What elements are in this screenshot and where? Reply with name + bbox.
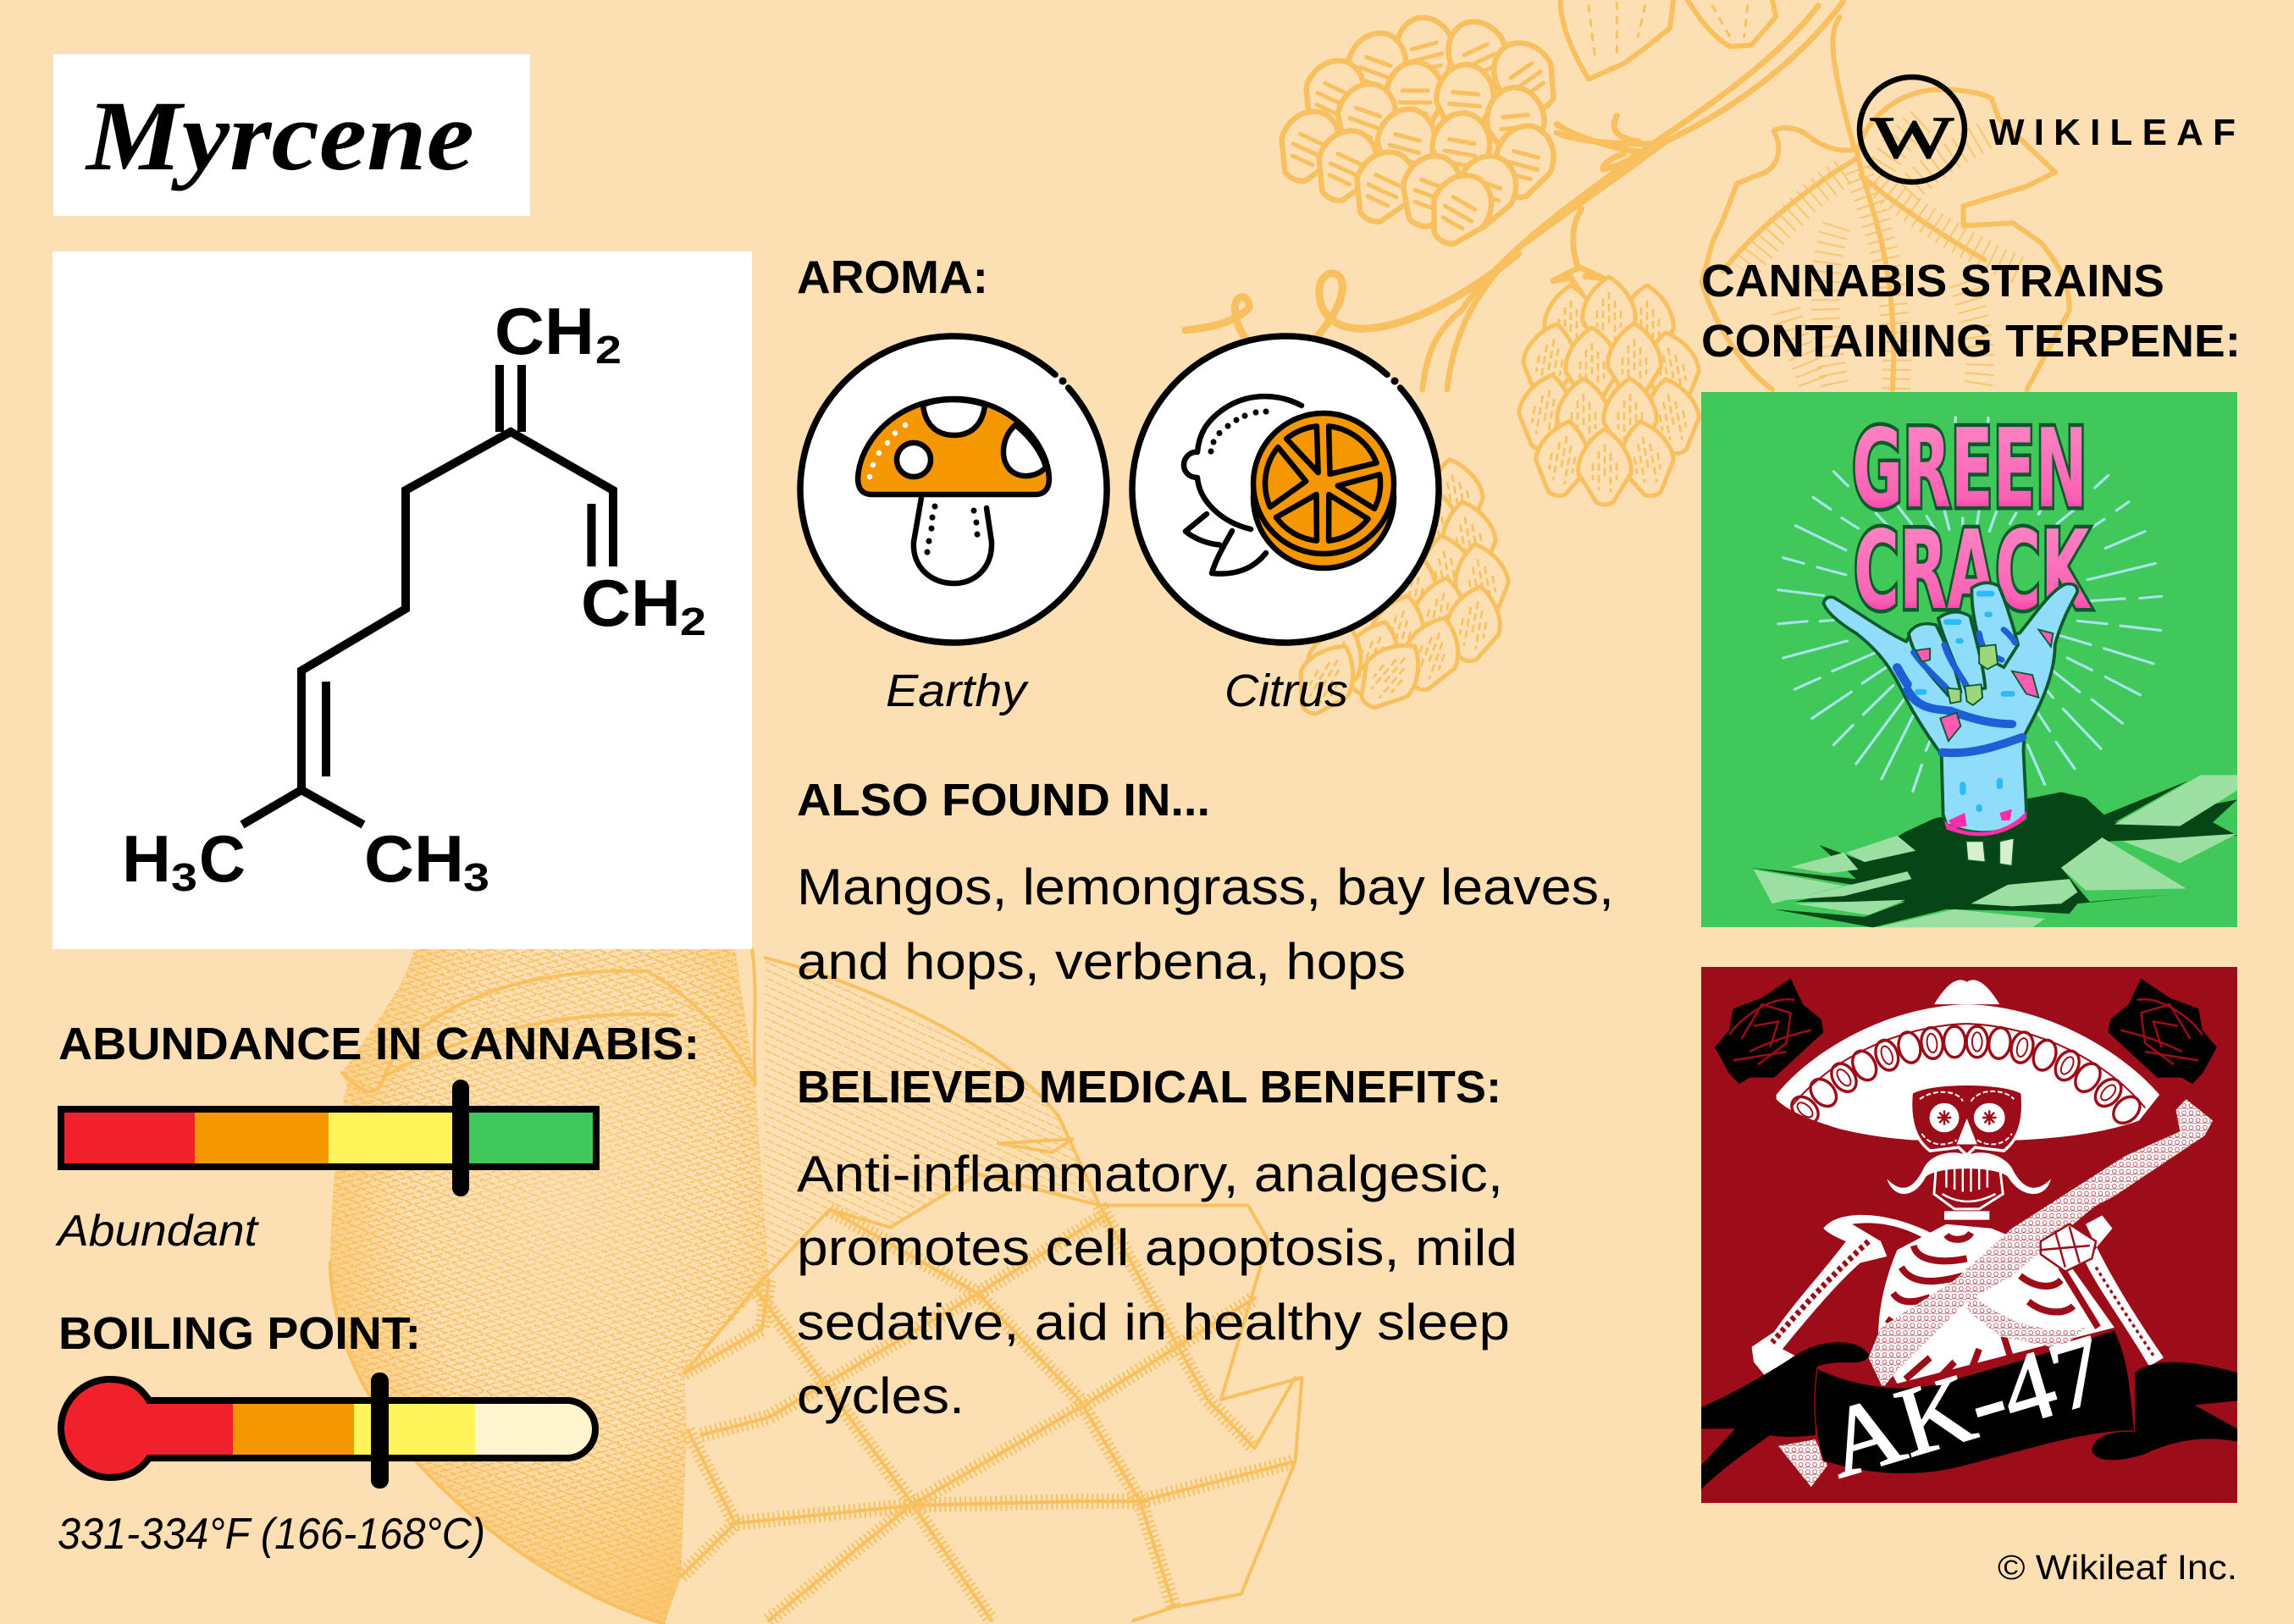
medical benefits text: cycles.: [797, 1367, 965, 1424]
strain name: AK-47: AK-47: [1814, 1315, 2117, 1500]
zombie hand: [1823, 583, 2077, 866]
title panel: [53, 54, 530, 216]
background hop cone: behind citrus: [1285, 455, 1514, 725]
logo: Wikileaf: [1860, 77, 2236, 182]
boiling point heading: BOILING POINT:: [58, 1308, 421, 1359]
also found in text: [797, 859, 1614, 990]
earthy label: Earthy: [886, 666, 1029, 716]
skeleton torso: [1878, 1224, 2114, 1384]
CH2 label right: CH: [581, 566, 681, 640]
CH3 label: CH: [364, 821, 464, 896]
H3C label: H: [122, 821, 171, 896]
strains heading: CONTAINING TERPENE:: [1701, 316, 2241, 367]
copyright: © Wikileaf Inc.: [1998, 1548, 2237, 1587]
background hop cone: hanging: [1513, 277, 1705, 505]
banner: [1701, 1329, 2237, 1489]
CH3 label: 3: [463, 855, 489, 899]
medical benefits text: sedative, aid in healthy sleep: [797, 1294, 1510, 1351]
aroma heading: AROMA:: [797, 251, 988, 303]
icon: earthy mushroom: [800, 336, 1107, 643]
large leaf: [1702, 17, 2070, 389]
abundance meter: [61, 1080, 596, 1196]
strains heading: [1701, 256, 2241, 367]
roses: [1715, 979, 2217, 1084]
rifle: [1778, 1099, 2213, 1487]
main stem: [1423, 2, 1843, 389]
art: sombrero skeleton: [1701, 979, 2237, 1489]
background hop cone: top: [1268, 11, 1570, 256]
strains heading: CANNABIS STRAINS: [1701, 256, 2164, 307]
curling tendril: [1186, 254, 1517, 339]
citrus label: Citrus: [1224, 666, 1348, 716]
crossed bones: [1752, 1215, 2164, 1377]
logo: Wikileaf: WIKILEAF: [1989, 112, 2236, 153]
CH2 label right: 2: [680, 599, 706, 644]
background illustration: vine and leaves: [1186, 0, 2070, 389]
also found in heading: ALSO FOUND IN...: [797, 775, 1210, 826]
H3C label: 3: [171, 855, 197, 899]
fruit scales: [681, 958, 1302, 1621]
abundance label: Abundant: [55, 1207, 260, 1256]
also found in text: Mangos, lemongrass, bay leaves,: [797, 859, 1614, 915]
icon: citrus fruit: [1132, 336, 1439, 643]
medical benefits heading: BELIEVED MEDICAL BENEFITS:: [797, 1062, 1501, 1113]
medical benefits text: promotes cell apoptosis, mild: [797, 1219, 1517, 1276]
fruit peel with hatching: [330, 949, 769, 1624]
medical benefits text: Anti-inflammatory, analgesic,: [797, 1146, 1503, 1202]
top leaves: [1561, 0, 1776, 79]
hat: [1777, 980, 2159, 1140]
CH2 label top: 2: [595, 328, 622, 372]
also found in text: and hops, verbena, hops: [797, 933, 1406, 990]
abundance heading: ABUNDANCE IN CANNABIS:: [58, 1019, 699, 1069]
boiling point value: 331-334°F (166-168°C): [58, 1510, 485, 1559]
logo: Wikileaf: W: [1871, 106, 1954, 171]
boiling point thermometer: [61, 1373, 595, 1489]
background illustration: fruit: [330, 949, 1302, 1624]
medical benefits text: [797, 1146, 1517, 1424]
CH2 label top: CH: [495, 294, 594, 368]
panel: molecular structure: [53, 251, 752, 949]
H3C label: [122, 821, 246, 899]
skeletal formula bonds: [242, 365, 613, 825]
hop cone stalk: [1556, 116, 1652, 169]
skull: [1887, 1084, 2051, 1220]
panel: Green Crack strain art: [1701, 392, 2237, 927]
cracked ground: [1750, 775, 2237, 927]
sunburst rays: [1778, 417, 2162, 792]
strain name: Green: GREEN: [1852, 406, 2087, 533]
title: Myrcene: [85, 80, 474, 191]
H3C label: C: [199, 821, 246, 896]
strain name: Crack: CRACK: [1854, 508, 2092, 634]
panel: AK-47 strain art: [1701, 967, 2237, 1503]
